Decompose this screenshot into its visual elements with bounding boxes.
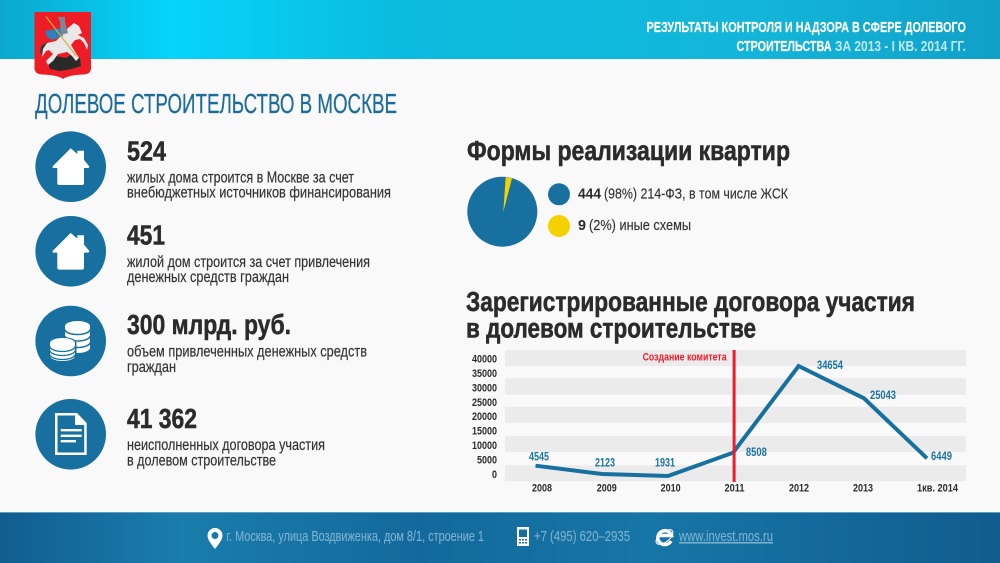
legend: 9: [578, 217, 586, 234]
data values: 2123: [595, 458, 615, 470]
heading: registered contracts: в долевом строительстве: [466, 312, 756, 344]
icon: browser e: [654, 527, 675, 547]
icon: phone: [517, 527, 529, 546]
stat: 524 houses: [35, 131, 391, 202]
footer phone: +7 (495) 620–2935: [534, 528, 630, 545]
icon: house: [35, 216, 106, 287]
header band: [0, 0, 1000, 59]
stat: 524 houses: жилых дома строится в Москве за счет: [127, 170, 354, 187]
x axis labels: 2013: [853, 483, 873, 495]
footer address: г. Москва, улица Воздвиженка, дом 8/1, строение 1: [226, 528, 484, 545]
committee marker: Создание комитета: [643, 352, 727, 364]
stat: 41 362 contracts: 41 362: [127, 403, 197, 434]
header title: [646, 20, 966, 55]
icon: house: [35, 131, 106, 202]
data values: [529, 360, 952, 470]
stat: 41 362 contracts: [35, 399, 325, 470]
y axis labels: 40000: [472, 354, 497, 366]
stat: 41 362 contracts: в долевом строительстве: [127, 453, 276, 470]
stat: 300 bn rubles: объем привлеченных денежных средств: [127, 344, 367, 361]
stat: 300 bn rubles: [35, 306, 367, 376]
y axis labels: 0: [492, 469, 497, 481]
stat: 41 362 contracts: неисполненных договора участия: [127, 437, 325, 454]
legend: 444: [578, 186, 602, 202]
x axis labels: 2008: [532, 483, 552, 495]
footer website: www.invest.mos.ru: [678, 528, 773, 545]
header title: СТРОИТЕЛЬСТВА: [736, 39, 832, 55]
x axis labels: [532, 483, 959, 495]
line chart: [472, 350, 966, 495]
stat: 451 houses: денежных средств граждан: [127, 269, 289, 286]
legend: (98%) 214-ФЗ, в том числе ЖСК: [604, 186, 788, 202]
data line: [536, 366, 927, 476]
y axis labels: 20000: [472, 411, 497, 423]
y axis labels: 15000: [472, 426, 497, 438]
stat: 524 houses: 524: [127, 136, 167, 166]
committee marker: [643, 350, 736, 482]
y axis labels: 25000: [472, 397, 497, 409]
footer phone: [517, 527, 630, 546]
x axis labels: 2009: [597, 483, 617, 495]
y axis labels: 35000: [472, 368, 497, 380]
data values: 8508: [746, 447, 767, 459]
icon: document: [35, 399, 106, 470]
y axis labels: [472, 354, 497, 481]
pie chart: [467, 177, 537, 247]
data values: 4545: [529, 452, 549, 464]
icon: coins: [35, 306, 106, 376]
stat: 300 bn rubles: 300 млрд. руб.: [127, 309, 291, 340]
stat: 451 houses: жилой дом строится за счет привлечения: [127, 254, 370, 271]
legend: (2%) иные схемы: [589, 217, 691, 234]
x axis labels: 2012: [789, 483, 809, 495]
header title: ЗА 2013 - I КВ. 2014 ГГ.: [835, 39, 966, 55]
y axis labels: 5000: [477, 454, 497, 466]
footer band: [0, 512, 1000, 563]
stat: 451 houses: [35, 216, 370, 287]
emblem of Moscow: [34, 12, 91, 79]
main heading: ДОЛЕВОЕ СТРОИТЕЛЬСТВО В МОСКВЕ: [35, 88, 397, 119]
icon: map pin: [208, 528, 222, 549]
stat: 300 bn rubles: граждан: [127, 359, 176, 376]
heading: apartment sale forms: Формы реализации квартир: [467, 135, 790, 166]
stat: 524 houses: внебюджетных источников финансирования: [127, 184, 391, 202]
y axis labels: 30000: [472, 382, 497, 394]
x axis labels: 1кв. 2014: [917, 483, 959, 495]
y axis labels: 10000: [472, 440, 497, 452]
footer website: [654, 527, 773, 547]
heading: registered contracts: [466, 286, 915, 344]
data values: 1931: [655, 458, 675, 470]
data values: 34654: [817, 360, 843, 372]
data values: 25043: [870, 390, 896, 402]
legend: [548, 183, 788, 237]
data values: 6449: [931, 451, 952, 463]
footer address: [208, 528, 484, 549]
x axis labels: 2010: [661, 483, 681, 495]
x axis labels: 2011: [724, 483, 744, 495]
stat: 451 houses: 451: [127, 220, 165, 250]
